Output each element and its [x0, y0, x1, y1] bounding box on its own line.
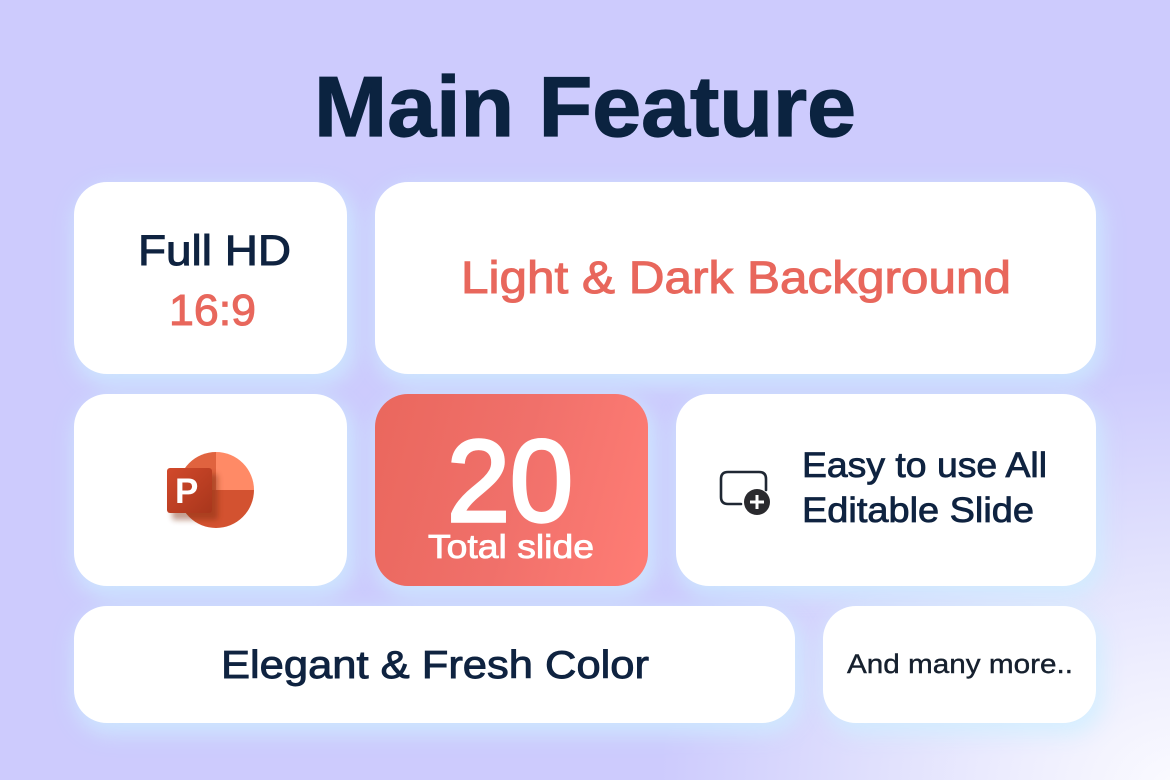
total slide label: Total slide [428, 528, 594, 565]
ratio 16:9: 16:9 [169, 286, 256, 335]
easy to use text: Easy to use All [802, 446, 1047, 485]
light and dark heading: Light & Dark Background [461, 252, 1011, 303]
easy to use text [802, 446, 1047, 530]
icon: powerpoint [167, 452, 254, 528]
full hd label: Full HD [138, 227, 291, 275]
panel: easy to use [676, 394, 1096, 586]
icon: add slide [721, 472, 770, 515]
and many more text: And many more.. [847, 649, 1073, 679]
panel: powerpoint [74, 394, 347, 586]
panel: and many more [823, 606, 1096, 723]
panel: total slides [375, 394, 648, 586]
panel: elegant color [74, 606, 795, 723]
letter p: P [175, 472, 198, 511]
panel: full hd [74, 182, 347, 374]
elegant color text: Elegant & Fresh Color [221, 644, 649, 687]
easy to use text: Editable Slide [802, 491, 1034, 530]
title: Main Feature [314, 60, 856, 155]
panel: light and dark background [375, 182, 1096, 374]
number 20: 20 [447, 416, 573, 546]
